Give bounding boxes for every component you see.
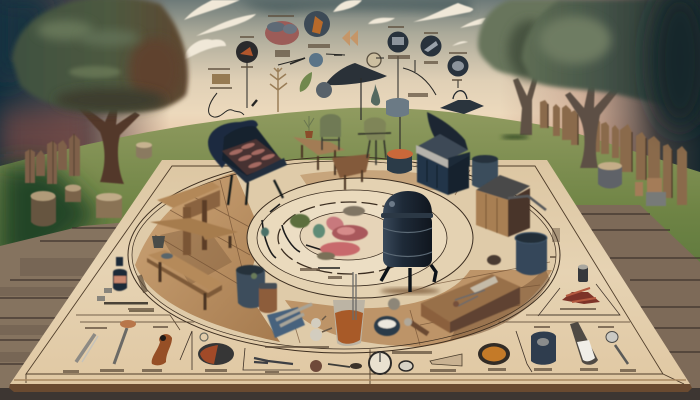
spoon [606,332,628,364]
white baster [570,322,598,365]
right fence [540,100,687,205]
picnic table far [293,137,370,190]
left shade on grass [0,165,100,265]
sky background [0,0,700,270]
cabinet smoker [476,175,546,237]
central circular diagram [247,178,473,298]
gas grill [416,112,470,195]
top icon: meat [265,21,299,45]
bin by grill [472,155,498,189]
centre meat and herbs [261,206,368,260]
bottom deck strip [0,388,700,400]
green chairs [320,114,391,165]
top icons: circles [236,11,468,76]
tray of tools [267,304,312,338]
bottle of sauce [113,257,127,291]
clouds [184,0,486,60]
top icon: herbs and leaves [212,30,358,112]
picnic table near [147,182,238,310]
spice pile and jar right [538,264,620,316]
tree stumps left [30,142,152,226]
back right tree [478,0,560,139]
glass of sauce with skewer [333,272,365,346]
grill wedge right [430,354,462,366]
fire bucket on pole [371,84,413,174]
board frame lines [14,166,686,384]
wooden board edge [9,384,692,392]
shakers and bar left [97,288,154,312]
garlic bulbs [310,316,332,341]
basting brush [243,348,350,372]
bowl and items beside glass [374,298,428,336]
large metal pot [515,232,547,275]
outer rings [128,157,560,353]
front right tree [522,0,700,168]
illegible captions on board [63,228,636,373]
central black smoker [380,191,440,294]
dial icons at front centre [350,352,413,374]
outer ring wood floor [132,160,556,350]
potted plant [304,116,314,138]
left fence [25,134,80,184]
plate of spice [180,331,234,370]
patio umbrella [325,63,387,120]
left tree [12,0,188,184]
stump and logs right [598,162,666,206]
wooden planning board [10,160,690,384]
caption bars by top icons [208,15,467,97]
hill of grass [0,108,700,400]
grilling tools bottom left [76,320,172,365]
small pot on table [152,236,165,248]
deck planks right [575,205,700,400]
hanging grill lid [440,91,484,114]
bowl of rub [478,331,532,372]
black can [531,332,556,365]
charcoal kettle grill [208,120,287,205]
wooden box with tools [421,255,521,333]
left metal bucket and jar [236,265,277,313]
deck planks left [0,222,130,400]
top icon: curly cord and arrows [209,54,458,117]
